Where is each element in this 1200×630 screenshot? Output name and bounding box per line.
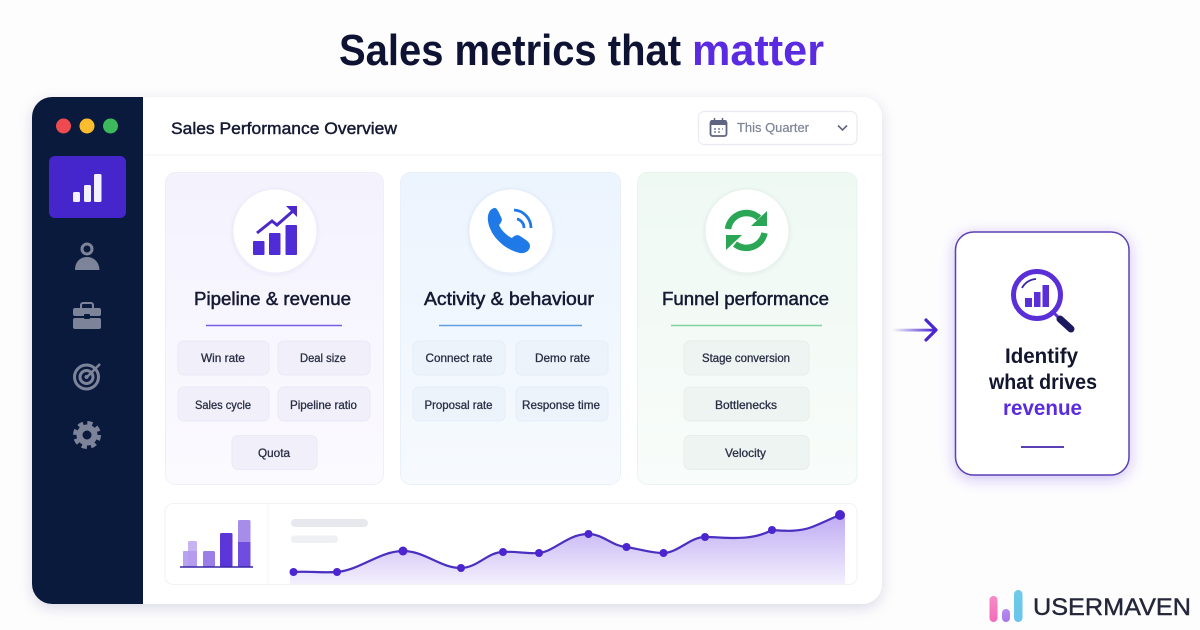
panel: activity and behaviour bbox=[400, 172, 620, 484]
line chart bbox=[290, 510, 845, 584]
metric chips: Response time bbox=[522, 398, 600, 412]
metric chips: Demo rate bbox=[535, 351, 590, 365]
icon: active analytics tile bbox=[49, 156, 126, 218]
sidebar bbox=[32, 97, 143, 604]
metric chips: Win rate bbox=[201, 351, 245, 365]
date dropdown: This Quarter bbox=[737, 120, 810, 135]
callout bbox=[956, 232, 1129, 475]
placeholder text lines bbox=[291, 519, 368, 543]
arrow bbox=[892, 320, 936, 340]
metric chips bbox=[178, 341, 370, 470]
icon: refresh arrows bbox=[705, 189, 789, 273]
metric chips: Bottlenecks bbox=[715, 398, 777, 412]
metric chips: Sales cycle bbox=[195, 398, 251, 412]
icon: phone bbox=[469, 189, 553, 273]
icon: growth chart bbox=[233, 189, 317, 273]
heading: Activity & behaviour bbox=[424, 289, 594, 309]
callout text: Identify bbox=[1005, 345, 1078, 368]
window control dots bbox=[56, 118, 118, 134]
callout text: revenue bbox=[1003, 397, 1082, 420]
metric chips: Deal size bbox=[300, 351, 346, 365]
title: matter bbox=[692, 26, 824, 75]
icon: magnifier with chart bbox=[1014, 272, 1071, 329]
dashboard heading: Sales Performance Overview bbox=[171, 119, 398, 138]
panel: trend strip bbox=[165, 504, 857, 584]
heading: Pipeline & revenue bbox=[194, 289, 351, 309]
logo bbox=[990, 590, 1191, 622]
metric chips: Quota bbox=[258, 446, 290, 460]
metric chips bbox=[413, 341, 608, 421]
panel: pipeline and revenue bbox=[166, 172, 384, 484]
metric chips: Pipeline ratio bbox=[290, 398, 357, 412]
icon: target bbox=[74, 364, 100, 389]
callout text: what drives bbox=[988, 371, 1097, 394]
title: Sales metrics that bbox=[339, 26, 681, 75]
metric chips: Proposal rate bbox=[424, 398, 493, 412]
metric chips: Connect rate bbox=[426, 351, 493, 365]
header bar bbox=[145, 112, 882, 155]
icon: gear bbox=[76, 424, 98, 446]
callout text bbox=[988, 345, 1097, 420]
bar chart bbox=[180, 520, 253, 567]
metric chips: Velocity bbox=[725, 446, 766, 460]
icon: briefcase bbox=[73, 303, 101, 329]
heading: Funnel performance bbox=[662, 289, 829, 309]
metric chips: Stage conversion bbox=[702, 351, 790, 365]
date dropdown bbox=[698, 112, 857, 144]
logo mark bbox=[990, 590, 1022, 622]
logo: USERMAVEN bbox=[1033, 594, 1191, 621]
metric chips bbox=[684, 341, 809, 470]
panel: funnel performance bbox=[638, 172, 857, 484]
dashboard window bbox=[32, 97, 882, 604]
icon: person bbox=[75, 244, 100, 270]
